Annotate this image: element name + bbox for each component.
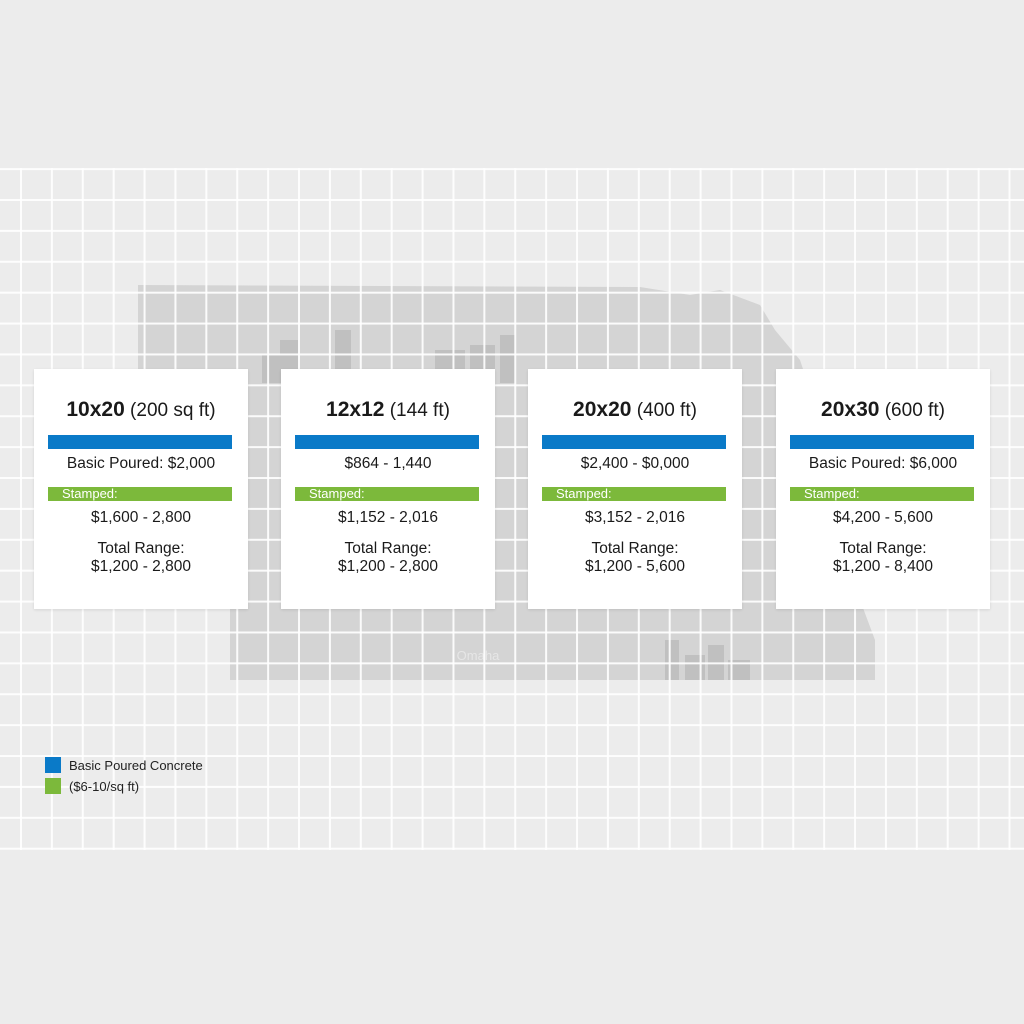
card: 10x20: $1,200 - 2,800 [91, 558, 191, 575]
card: 12x12: 12x12 (144 ft) [326, 398, 450, 421]
card: 20x20: $1,200 - 5,600 [585, 558, 685, 575]
card: 20x30: $1,200 - 8,400 [833, 558, 933, 575]
card: 10x20: Total Range: [97, 540, 185, 557]
card: 20x20: Stamped: [556, 486, 612, 501]
card: 10x20 [34, 369, 248, 609]
card: 12x12: $1,152 - 2,016 [338, 509, 438, 526]
card: 20x30: Total Range: [839, 540, 927, 557]
card: 20x20: $2,400 - $0,000 [581, 455, 689, 472]
card: 10x20: $1,600 - 2,800 [91, 509, 191, 526]
card: 20x20: Total Range: [591, 540, 679, 557]
card: 10x20: 10x20 (200 sq ft) [66, 398, 216, 421]
card: 12x12: $864 - 1,440 [344, 455, 432, 472]
legend: ($6-10/sq ft) [69, 779, 139, 794]
legend [45, 757, 203, 794]
card: 10x20: Stamped: [62, 486, 118, 501]
card: 20x30: 20x30 (600 ft) [821, 398, 945, 421]
card: 20x30 [776, 369, 990, 609]
map silhouette: Omaha [457, 648, 500, 663]
card: 10x20: Basic Poured: $2,000 [67, 455, 215, 472]
card: 12x12: $1,200 - 2,800 [338, 558, 438, 575]
legend: Basic Poured Concrete [69, 758, 203, 773]
card: 20x30: Stamped: [804, 486, 860, 501]
card: 20x20: $3,152 - 2,016 [585, 509, 685, 526]
card: 12x12: Total Range: [344, 540, 432, 557]
card: 12x12 [281, 369, 495, 609]
card: 20x20 [528, 369, 742, 609]
card: 20x30: $4,200 - 5,600 [833, 509, 933, 526]
card: 20x20: 20x20 (400 ft) [573, 398, 697, 421]
card: 20x30: Basic Poured: $6,000 [809, 455, 957, 472]
card: 12x12: Stamped: [309, 486, 365, 501]
